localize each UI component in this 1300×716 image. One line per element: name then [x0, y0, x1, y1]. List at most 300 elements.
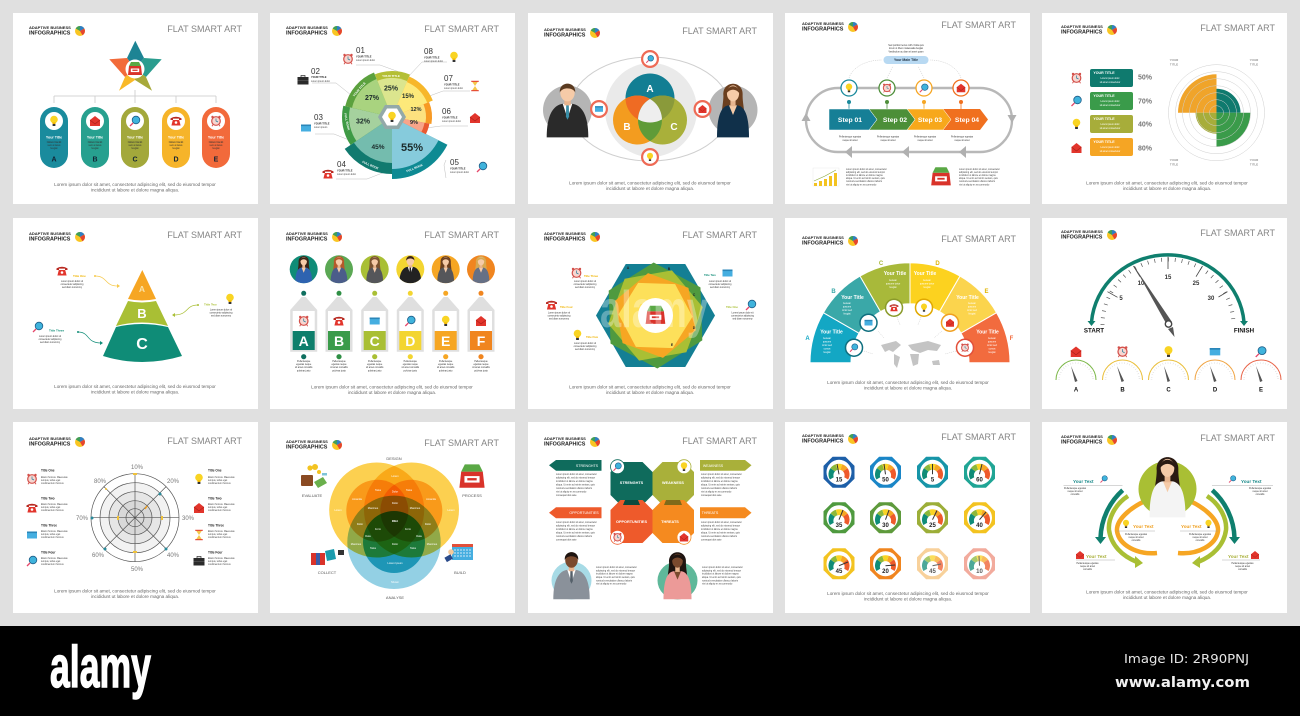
callout bulb: consectetur adipiscing	[574, 345, 597, 348]
header: ADAPTIVE BUSINESS	[29, 436, 71, 441]
callout clock: consectetur adipiscing	[574, 283, 597, 286]
tag C: C	[370, 333, 380, 349]
step chevrons	[829, 109, 988, 130]
banner opportunities: nostrud exercitation ullamco laboris	[556, 535, 593, 538]
map arrows	[864, 317, 956, 354]
tag C: Pellentesque	[368, 360, 382, 363]
venn labels: Maximus	[351, 542, 362, 546]
callout inner left: Your Text	[1133, 524, 1154, 529]
pill D: Your Title	[168, 136, 184, 140]
footer text: Lorem ipsum dolor sit amet, consectetur adipiscing elit, sed do eiusmod tempor	[1086, 180, 1248, 186]
header	[286, 438, 499, 451]
venn labels: Shown	[391, 580, 400, 584]
callout one	[56, 267, 120, 289]
legend row 2: Lorem ipsum dolor	[1100, 100, 1120, 103]
step captions: Pellentesque egestas	[914, 136, 937, 138]
tag D	[396, 255, 424, 372]
text block man: adipiscing elit, sed do eiusmod tempor	[596, 569, 635, 572]
bar chart icon	[813, 168, 839, 186]
pill A	[40, 107, 68, 168]
item 08: Lorem ipsum dolor	[424, 60, 443, 63]
text block man: aliqua. Ut enim ad minim veniam, quis	[596, 576, 636, 579]
woman portrait	[658, 552, 698, 600]
header: FLAT SMART ART	[1200, 23, 1275, 33]
callout inner left	[1117, 520, 1155, 542]
ring labels: FULL BOOK	[406, 163, 424, 173]
radial labels: TITLE	[1170, 62, 1178, 66]
small gauge E	[1241, 347, 1281, 394]
text block right: adipiscing elit, sed do eiusmod tempor	[959, 171, 998, 174]
text block left: Lorem ipsum dolor sit amet, consectetur	[846, 168, 887, 171]
item 07	[444, 74, 479, 91]
fan titles: posuere	[968, 306, 977, 308]
tag D: D	[405, 333, 415, 349]
footer text: incididunt ut labore et dolore magna aliqua.	[606, 390, 694, 395]
banner threats: consequat duis aute	[701, 538, 722, 542]
item 04: YOUR TITLE	[337, 168, 353, 172]
main gauge	[1084, 255, 1255, 337]
left list: tempus, tellus eget	[41, 479, 61, 482]
left list: Etiam rhoncus. Maecenas	[41, 476, 68, 479]
header: FLAT SMART ART	[941, 432, 1016, 442]
banner threats	[700, 507, 752, 542]
venn diagram: B	[623, 122, 631, 133]
header	[1061, 23, 1275, 36]
fan titles: posuere tortor	[886, 282, 900, 286]
man portrait	[552, 552, 592, 600]
pill C: Your Title	[127, 136, 143, 140]
header: ADAPTIVE BUSINESS	[802, 433, 844, 438]
icon: coins	[301, 464, 327, 488]
icon: cash bag	[459, 464, 485, 488]
left list: Etiam rhoncus. Maecenas	[41, 530, 68, 533]
pill B: Nullam blandit	[88, 141, 103, 144]
pill E: E	[214, 156, 219, 164]
item 05	[450, 158, 487, 174]
right list: condimentum rhoncus	[208, 536, 231, 539]
banner weakness: incididunt ut labore et dolore magna	[701, 480, 738, 483]
venn diagram: C	[670, 122, 678, 133]
venn labels: IDEA	[392, 519, 398, 523]
callout inner left: Pellentesque egestas	[1125, 533, 1148, 536]
item 01: Lorem ipsum dolor	[356, 59, 375, 62]
axis labels: EVALUATE	[302, 493, 322, 498]
tag F: sit amet convallis	[472, 366, 491, 369]
text block woman: aliqua. Ut enim ad minim veniam, quis	[702, 576, 742, 579]
banner weakness: adipiscing elit, sed do eiusmod tempor	[701, 476, 740, 480]
radial labels: YOUR	[1250, 158, 1259, 162]
radial labels: YOUR	[1250, 58, 1259, 62]
header: FLAT SMART ART	[1200, 433, 1275, 443]
tag E	[432, 255, 460, 372]
header: FLAT SMART ART	[167, 230, 242, 240]
callout clock: Title Three	[584, 274, 599, 278]
gauge 40: 40	[976, 523, 983, 529]
item 01: 01	[356, 46, 365, 55]
step captions: neque sit amet	[917, 139, 933, 142]
fan titles: tortor sed	[967, 309, 978, 312]
fan titles: feugiat	[989, 351, 996, 354]
gauge 20: 20	[882, 569, 889, 575]
pyramid	[103, 270, 182, 362]
radial labels: TITLE	[1250, 162, 1258, 166]
radial sectors	[1168, 65, 1264, 161]
step chevrons: Step 01	[838, 117, 862, 124]
panel: speedometer	[1042, 218, 1287, 409]
right list: condimentum rhoncus	[208, 563, 231, 566]
footer text: Lorem ipsum dolor sit amet, consectetur adipiscing elit, sed do eiusmod tempor	[827, 380, 989, 385]
item 06: Lorem ipsum dolor	[442, 120, 461, 123]
callout magnifier: consectetur adipiscing	[731, 314, 755, 318]
banner weakness	[700, 460, 752, 497]
callout inner right: neque sit amet	[1192, 536, 1208, 539]
header: ADAPTIVE BUSINESS	[29, 231, 71, 236]
axis labels: COLLECT	[318, 570, 337, 575]
header: INFOGRAPHICS	[29, 31, 71, 37]
right list: tempus, tellus eget	[208, 560, 228, 563]
venn labels	[334, 474, 455, 584]
percent labels: 25%	[384, 86, 399, 92]
callout top right: Pellentesque egestas	[1249, 487, 1272, 490]
pill E: sem at lacus	[210, 144, 223, 147]
radar labels: 40%	[167, 553, 180, 559]
pill C: feugiat	[132, 147, 139, 150]
radar labels: 70%	[76, 516, 89, 522]
percent labels: 27%	[365, 95, 380, 102]
pill D: Nullam blandit	[169, 141, 184, 144]
tag D: pulvinar justo	[404, 370, 418, 372]
callout clock: sed diam nonummy	[575, 287, 596, 289]
tag A: Pellentesque	[297, 360, 311, 363]
SWOT octagons: THREATS	[661, 520, 679, 524]
text block man: incididunt ut labore et dolore magna	[596, 573, 633, 576]
text block woman: nostrud exercitation ullamco laboris	[702, 579, 739, 582]
banner strengths: incididunt ut labore et dolore magna	[556, 480, 593, 483]
header: FLAT SMART ART	[424, 24, 499, 34]
banner opportunities: aliqua. Ut enim ad minim veniam, quis	[556, 532, 596, 534]
banner threats: incididunt ut labore et dolore magna	[701, 528, 738, 531]
fan titles: tortor sed	[987, 344, 998, 347]
hexagon letters: D	[693, 326, 696, 330]
fan letters: A	[805, 336, 810, 342]
ring icon left	[590, 100, 608, 118]
header	[286, 230, 499, 243]
header: ADAPTIVE BUSINESS	[544, 231, 586, 236]
right list: tempus, tellus eget	[208, 479, 228, 482]
legend row 2: 70%	[1138, 98, 1153, 106]
header	[29, 436, 242, 448]
venn labels: Dolor	[392, 542, 398, 546]
fan titles: Aenean	[843, 302, 852, 305]
callout two: Lorem ipsum dolor sit	[210, 308, 232, 312]
header: INFOGRAPHICS	[802, 241, 844, 247]
header: FLAT SMART ART	[424, 438, 499, 448]
ring labels: FULL BOOK	[343, 113, 351, 132]
ring icon bottom	[641, 148, 659, 166]
callout lower left: Pellentesque egestas	[1077, 562, 1099, 565]
callout bulb	[574, 330, 599, 351]
banner strengths: adipiscing elit, sed do eiusmod tempor	[556, 476, 595, 480]
small gauge A	[1056, 346, 1096, 394]
callout top right	[1212, 476, 1273, 496]
fan titles: feugiat	[924, 286, 931, 289]
banner opportunities: incididunt ut labore et dolore magna	[556, 528, 593, 531]
item 04: 04	[337, 160, 346, 169]
pill A: sem at lacus	[48, 144, 61, 147]
text block left	[846, 168, 887, 186]
header: ADAPTIVE BUSINESS	[29, 25, 71, 30]
callout magnifier: sed diam nonummy	[732, 318, 753, 320]
gauge 45 faded: 45	[929, 569, 936, 575]
header: INFOGRAPHICS	[1061, 440, 1103, 446]
gauge 10 faded	[964, 548, 995, 579]
callout three: sed diam nonummy	[40, 342, 61, 344]
right list: Title Three	[208, 524, 224, 528]
callout two: Title Two	[204, 302, 217, 306]
header: FLAT SMART ART	[1200, 228, 1275, 238]
header: INFOGRAPHICS	[286, 31, 328, 37]
right list: Title Four	[208, 550, 223, 554]
header: FLAT SMART ART	[167, 24, 242, 34]
tag B	[325, 255, 353, 372]
SWOT octagons	[610, 462, 694, 543]
text block left: adipiscing elit, sed do eiusmod tempor	[846, 171, 885, 174]
pill E	[202, 107, 230, 168]
header: ADAPTIVE BUSINESS	[544, 27, 586, 32]
banner threats: Lorem ipsum dolor sit amet, consectetur	[701, 521, 742, 524]
callout top left: Pellentesque egestas	[1064, 487, 1087, 490]
tag A: egestas neque	[296, 363, 312, 366]
small gauge A: A	[1074, 388, 1079, 394]
header	[544, 26, 757, 39]
main title	[884, 44, 928, 64]
header: ADAPTIVE BUSINESS	[1061, 434, 1103, 439]
image id: Image ID: 2R90PNJ	[1124, 651, 1249, 666]
fan titles: tortor sed	[842, 309, 853, 312]
banner strengths: Lorem ipsum dolor sit amet, consectetur	[556, 473, 597, 476]
banner weakness: nostrud exercitation ullamco laboris	[701, 487, 738, 490]
hexagon letters: E	[671, 343, 674, 347]
radial labels: TITLE	[1250, 62, 1258, 66]
fan titles: Your Title	[820, 330, 843, 336]
venn labels: Data	[365, 534, 371, 538]
fan titles: Aenean	[889, 279, 898, 282]
callout top left	[1064, 476, 1122, 496]
text block right: nostrud exercitation ullamco laboris	[959, 180, 996, 183]
legend row 3: 40%	[1138, 122, 1153, 128]
text block man: Lorem ipsum dolor sit amet, consectetur	[596, 566, 637, 569]
header: FLAT SMART ART	[941, 20, 1016, 30]
legend row 3: Lorem ipsum dolor	[1100, 123, 1120, 126]
callout lower right	[1222, 551, 1260, 571]
gauge 35: 35	[836, 523, 843, 529]
left list: condimentum rhoncus	[41, 563, 64, 566]
fan wedges	[810, 263, 1010, 363]
world map	[881, 341, 941, 368]
main title: Vestibulum ac diam sit amet quam	[889, 50, 924, 54]
fan titles: feugiat	[969, 312, 976, 316]
step chevrons: Step 04	[955, 117, 979, 124]
callout phone: sed diam nonummy	[549, 318, 570, 320]
footer text: Lorem ipsum dolor sit amet, consectetur adipiscing elit, sed do eiusmod tempor	[569, 384, 731, 390]
panel: pie chart	[270, 13, 515, 204]
percent labels: 12%	[410, 107, 422, 113]
pill D: sem at lacus	[170, 144, 183, 147]
callout lower left	[1076, 551, 1115, 571]
right list	[194, 468, 235, 566]
tag E: egestas neque	[438, 363, 454, 366]
step chevrons: Step 03	[918, 117, 942, 124]
text block right: nisi ut aliquip ex ea commodo	[959, 184, 990, 186]
right list: condimentum rhoncus	[208, 482, 231, 485]
venn labels: Lorem	[447, 508, 455, 512]
fan titles: Your Title	[976, 330, 999, 336]
callout lower right: neque sit amet	[1235, 565, 1250, 568]
pyramid: C	[136, 336, 148, 353]
pill A: A	[51, 156, 57, 164]
header: FLAT SMART ART	[424, 230, 499, 240]
fan titles: Aenean	[968, 302, 977, 305]
callout phone	[546, 301, 574, 320]
axis labels: ANALYSE	[386, 595, 404, 600]
step captions: neque sit amet	[880, 139, 896, 142]
callout card	[704, 270, 732, 289]
header: ADAPTIVE BUSINESS	[286, 25, 328, 30]
curved arrows	[1100, 490, 1234, 562]
fan icons	[846, 299, 974, 356]
header	[286, 24, 499, 37]
legend row 2: YOUR TITLE	[1093, 94, 1115, 98]
footer text: incididunt ut labore et dolore magna aliqua.	[864, 386, 952, 391]
fan titles: tortor sed	[822, 344, 833, 347]
legend row 2	[1072, 92, 1153, 110]
venn labels: Talus	[375, 488, 382, 492]
step captions: neque sit amet	[842, 139, 858, 142]
tag A: pulvinar justo	[297, 370, 311, 372]
banner strengths: consequat duis aute	[556, 494, 577, 497]
fan titles: Your Title	[956, 295, 979, 301]
fan titles: Your Title	[914, 271, 937, 277]
step captions	[839, 136, 974, 142]
header	[544, 230, 757, 243]
footer text: Lorem ipsum dolor sit amet, consectetur adipiscing elit, sed do eiusmod tempor	[827, 591, 989, 596]
dashed links	[849, 60, 961, 78]
tag E: Pellentesque	[439, 360, 453, 363]
item 06: 06	[442, 107, 451, 116]
text block woman: adipiscing elit, sed do eiusmod tempor	[702, 569, 741, 572]
gauge 15: 15	[836, 478, 843, 484]
pill A: Nullam blandit	[47, 141, 62, 144]
header: INFOGRAPHICS	[1061, 235, 1103, 241]
callout clock	[572, 268, 599, 289]
callout three: Lorem ipsum dolor sit	[39, 335, 61, 338]
left list: condimentum rhoncus	[41, 482, 64, 485]
header	[544, 436, 757, 448]
text block woman: incididunt ut labore et dolore magna	[702, 573, 739, 576]
banner weakness: WEAKNESS	[703, 464, 724, 468]
callout magnifier: Title One	[726, 305, 738, 309]
pyramid: B	[137, 306, 147, 321]
pill B	[81, 107, 109, 168]
header: INFOGRAPHICS	[802, 27, 844, 33]
item 01: YOUR TITLE	[356, 54, 372, 58]
header: FLAT SMART ART	[682, 230, 757, 240]
venn labels: Dolor	[425, 522, 431, 526]
header	[1061, 433, 1275, 446]
footer text: incididunt ut labore et dolore magna aliqua.	[1123, 186, 1211, 191]
small gauge C	[1148, 346, 1188, 394]
man portrait	[543, 84, 592, 137]
banner opportunities: OPPORTUNITIES	[569, 511, 599, 515]
callout one: sed diam nonummy	[62, 287, 83, 289]
radar labels: 10%	[131, 465, 144, 471]
gauge 45	[824, 548, 854, 579]
venn labels: Lorem	[334, 508, 342, 512]
gauge 50: 50	[882, 478, 889, 484]
item 02: YOUR TITLE	[311, 75, 327, 79]
header: ADAPTIVE BUSINESS	[802, 21, 844, 26]
tag F: pulvinar justo	[474, 370, 488, 372]
step captions: Pellentesque egestas	[951, 136, 974, 138]
callout one: consectetur adipiscing	[61, 283, 84, 286]
pill A: Your Title	[46, 136, 62, 140]
callout inner left: neque sit amet	[1128, 536, 1144, 539]
pill A: feugiat	[51, 147, 58, 150]
fan letters: B	[831, 289, 836, 295]
small gauge D: D	[1213, 388, 1218, 394]
pill C: Nullam blandit	[128, 141, 143, 144]
text block woman: Lorem ipsum dolor sit amet, consectetur	[702, 566, 743, 569]
footer text: Lorem ipsum dolor sit amet, consectetur adipiscing elit, sed do eiusmod tempor	[311, 384, 473, 390]
pyramid: A	[139, 284, 145, 294]
ring icons	[841, 80, 969, 110]
venn labels: Form	[375, 527, 381, 531]
fan titles: feugiat	[824, 351, 831, 354]
tag E: pulvinar justo	[439, 370, 453, 372]
callout top right: neque sit amet	[1252, 490, 1268, 493]
tag F	[467, 255, 495, 372]
fan letters: C	[879, 261, 884, 267]
stock footer bar	[0, 626, 1300, 716]
callout top left: convallis	[1071, 494, 1080, 496]
fan titles: posuere	[843, 306, 852, 308]
banner weakness: nisi ut aliquip ex ea commodo	[701, 490, 732, 494]
text block right: aliqua. Ut enim ad minim veniam, quis	[959, 177, 999, 180]
header: INFOGRAPHICS	[29, 237, 71, 243]
venn diagram	[605, 63, 697, 157]
left list: tempus, tellus eget	[41, 560, 61, 563]
venn labels: Dolor	[357, 522, 363, 526]
gauge 5	[917, 457, 948, 488]
banner strengths: nostrud exercitation ullamco laboris	[556, 487, 593, 490]
header: ADAPTIVE BUSINESS	[286, 439, 328, 444]
step chevrons: Step 02	[883, 117, 907, 124]
venn circles	[329, 462, 459, 589]
icon: binders	[311, 549, 344, 565]
main gauge: 25	[1193, 281, 1200, 287]
header: ADAPTIVE BUSINESS	[1061, 229, 1103, 234]
header: INFOGRAPHICS	[286, 445, 328, 451]
text block left: aliqua. Ut enim ad minim veniam, quis	[846, 177, 886, 180]
callout card: Lorem ipsum dolor sit	[709, 280, 731, 283]
small gauge B	[1102, 346, 1142, 394]
pill D	[162, 107, 190, 168]
item 06: YOUR TITLE	[442, 116, 458, 120]
text block right	[959, 168, 1000, 186]
text block man: nisi ut aliquip ex ea commodo	[596, 583, 627, 586]
footer text: Lorem ipsum dolor sit amet, consectetur adipiscing elit, sed do eiusmod tempor	[54, 384, 216, 389]
venn labels: Form	[405, 527, 411, 531]
